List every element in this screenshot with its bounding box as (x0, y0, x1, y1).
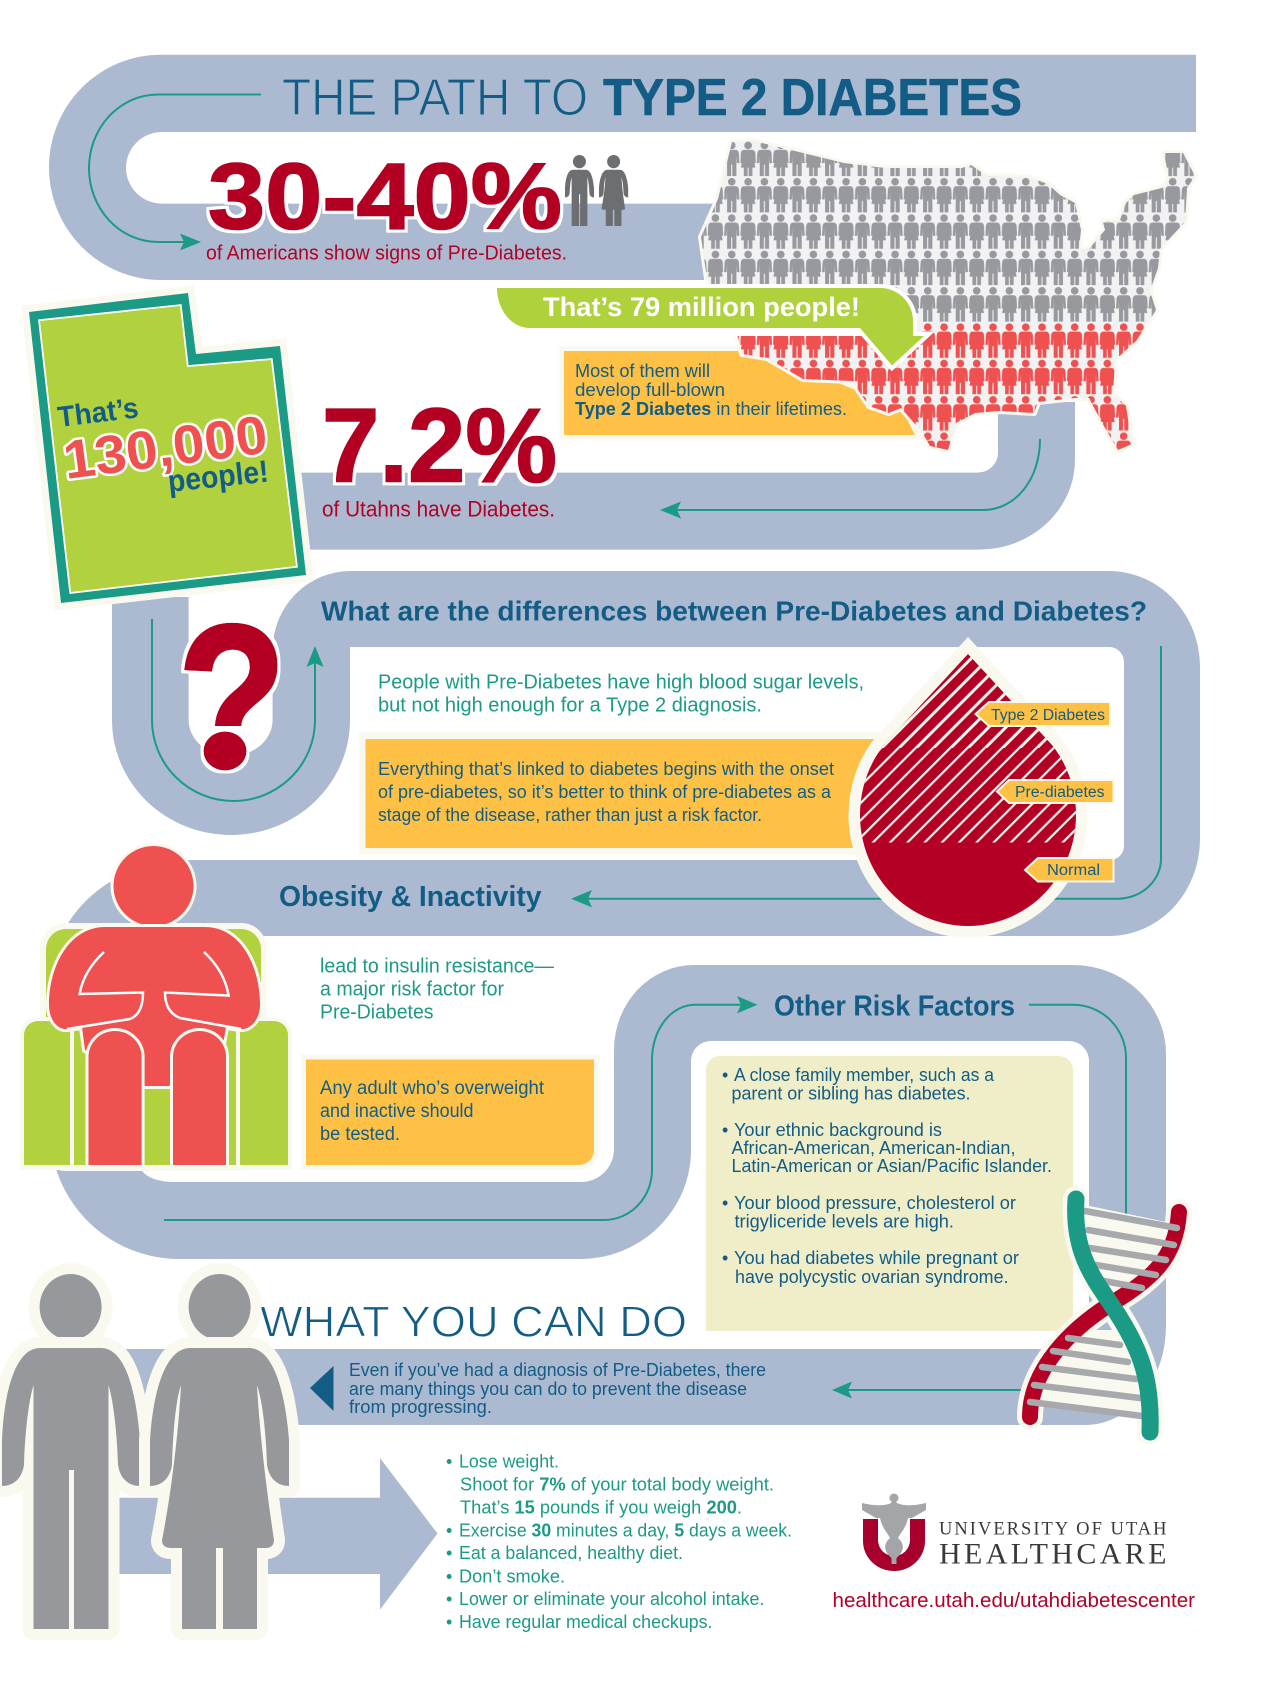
woman figure (150, 1274, 289, 1629)
text: action list (446, 1450, 792, 1632)
icon: man and woman (565, 155, 628, 226)
DNA rungs (1030, 1211, 1177, 1416)
chart: blood drop stages (850, 640, 1114, 926)
title: TYPE 2 DIABETES (603, 69, 1022, 127)
title: THE PATH TO (282, 69, 588, 127)
text: action list: • (446, 1543, 452, 1563)
man figure (2, 1274, 140, 1629)
person right leg (173, 1031, 226, 1165)
arrow: toward 7.2 percent (660, 439, 1040, 518)
arrow: bottom band left (832, 1382, 1030, 1398)
text: insulin resistance: a major risk factor for (320, 978, 504, 1000)
text: action list: Lose weight. (459, 1450, 559, 1472)
panel: risk factor list: Latin-American or Asian/Pacific Islander. (732, 1156, 1052, 1176)
text: even if diagnosed (349, 1360, 766, 1417)
text: action list: • (446, 1589, 452, 1609)
icon: triangle pointer (310, 1366, 334, 1411)
stat: 30-40 percent: 30-40% (208, 144, 562, 248)
stat: 7.2 percent: of Utahns have Diabetes. (322, 496, 555, 522)
stat: 7.2 percent: 7.2% (322, 388, 557, 504)
callout: any adult should be tested: and inactive should (320, 1101, 474, 1122)
callout: 79 million people (497, 288, 924, 366)
label: Pre-diabetes: Pre-diabetes (1015, 784, 1105, 801)
icon: question mark (181, 622, 280, 774)
person torso (49, 927, 260, 1086)
text: even if diagnosed: Even if you’ve had a diagnosis of Pre-Diabetes, there (349, 1360, 766, 1380)
callout: most will develop diabetes: Most of them will (575, 361, 710, 381)
panel: risk factor list: You had diabetes while pregnant or (734, 1248, 1019, 1268)
map: Utah: 130,000 (60, 405, 271, 491)
person arms (67, 952, 241, 1029)
text: pre-diabetes definition: People with Pre-Diabetes have high blood sugar levels, (378, 672, 864, 694)
map: Utah: people! (166, 454, 270, 499)
callout: stage of the disease (366, 739, 892, 848)
arrow: big arrow to action list (118, 1458, 438, 1610)
heading: obesity and inactivity: Obesity & Inactivity (279, 881, 542, 913)
title (282, 69, 1022, 127)
arrow: right side down (1029, 1005, 1126, 1215)
text: even if diagnosed: from progressing. (349, 1397, 492, 1417)
callout: most will develop diabetes: develop full-blown (575, 380, 725, 400)
arrow: U turn (152, 619, 324, 801)
heading: differences: What are the differences between Pre-Diabetes and Diabetes? (321, 596, 1147, 626)
map: Utah (29, 293, 306, 603)
callout: any adult should be tested: be tested. (320, 1124, 400, 1145)
text: action list: Have regular medical checkups. (459, 1611, 712, 1632)
text: pre-diabetes definition (378, 672, 864, 716)
logo wordmark (939, 1520, 1166, 1570)
panel: risk factor list (706, 1056, 1073, 1331)
text: action list: • (446, 1452, 452, 1472)
callout: stage of the disease: of pre-diabetes, so it’s better to think of pre-diabetes as a (378, 782, 832, 802)
callout: 79 million people: That’s 79 million people! (543, 292, 860, 322)
panel: risk factor list: parent or sibling has diabetes. (732, 1084, 970, 1104)
text: website url: healthcare.utah.edu/utahdiabetescenter (832, 1590, 1195, 1612)
path band: Utah (300, 402, 1075, 550)
panel: risk factor list: • (722, 1120, 728, 1140)
callout: any adult should be tested: Any adult who’s overweight (320, 1078, 545, 1099)
panel: risk factor list: • (722, 1065, 728, 1085)
icon: man and woman large (2, 1274, 289, 1629)
map: USA of people (695, 135, 1205, 456)
heading: what you can do: WHAT YOU CAN DO (260, 1298, 687, 1346)
icon: person sitting in chair (20, 846, 292, 1170)
label: Type 2 Diabetes (976, 702, 1110, 726)
text: action list: Don’t smoke. (459, 1566, 565, 1586)
path band: title and Americans (49, 55, 1196, 280)
person head (114, 846, 194, 926)
text: insulin resistance: Pre-Diabetes (320, 1002, 434, 1024)
panel: risk factor list: A close family member, such as a (734, 1065, 995, 1085)
logo red U (863, 1519, 925, 1571)
icon: question mark: ? (178, 583, 286, 815)
callout: most will develop diabetes: Type 2 Diabetes in their lifetimes. (575, 399, 847, 419)
text: insulin resistance: lead to insulin resistance— (320, 956, 554, 978)
logo: University of Utah Healthcare (862, 1494, 1166, 1571)
callout: any adult should be tested (306, 1060, 594, 1165)
text: even if diagnosed: are many things you can do to prevent the disease (349, 1379, 747, 1399)
callout: most will develop diabetes (564, 351, 915, 435)
logo caduceus (862, 1494, 926, 1564)
icon: DNA helix (1030, 1199, 1185, 1432)
label: Pre-diabetes (997, 780, 1114, 803)
panel: risk factor list: • (722, 1193, 728, 1213)
panel: risk factor list: • (722, 1248, 728, 1268)
text: action list: Lower or eliminate your alcohol intake. (459, 1588, 764, 1609)
text: action list: Exercise 30 minutes a day, 5 days a week. (459, 1520, 792, 1540)
text: insulin resistance (320, 956, 554, 1024)
path band: differences (112, 571, 1200, 936)
text: pre-diabetes definition: but not high enough for a Type 2 diagnosis. (378, 694, 762, 716)
callout: stage of the disease: stage of the disease, rather than just a risk factor. (378, 805, 762, 825)
text: action list: Shoot for 7% of your total body weight. (460, 1474, 774, 1494)
logo wordmark: HEALTHCARE (939, 1538, 1166, 1570)
callout: stage of the disease: Everything that’s linked to diabetes begins with the onset (378, 759, 834, 779)
logo wordmark: UNIVERSITY OF UTAH (939, 1520, 1166, 1540)
heading: other risk factors: Other Risk Factors (774, 990, 1015, 1022)
text: action list: • (446, 1612, 452, 1632)
label: Normal (1025, 858, 1114, 882)
label: Normal: Normal (1047, 862, 1100, 879)
text: action list: • (446, 1566, 452, 1586)
person left leg (88, 1031, 142, 1165)
path band: obesity, other risk factors, what you can do (50, 860, 1166, 1425)
panel: risk factor list: have polycystic ovarian syndrome. (735, 1267, 1008, 1287)
panel: risk factor list: Your blood pressure, cholesterol or (734, 1193, 1016, 1213)
panel: risk factor list: trigyliceride levels are high. (734, 1212, 954, 1232)
arrow: into 30-40 percent (89, 94, 261, 250)
label: Type 2 Diabetes: Type 2 Diabetes (991, 707, 1105, 724)
panel: risk factor list: African-American, American-Indian, (732, 1138, 1016, 1158)
text: action list: • (446, 1520, 452, 1540)
arrow: through lower bend to Other Risk Factors (164, 996, 758, 1220)
map: Utah: That’s (56, 392, 140, 434)
stat: 30-40 percent: of Americans show signs of Pre-Diabetes. (206, 242, 567, 264)
text: action list: Eat a balanced, healthy diet. (459, 1542, 683, 1563)
arrow: right side to Obesity (571, 646, 1161, 907)
text: action list: That’s 15 pounds if you weigh 200. (460, 1496, 742, 1518)
panel: risk factor list: Your ethnic background is (734, 1120, 942, 1140)
